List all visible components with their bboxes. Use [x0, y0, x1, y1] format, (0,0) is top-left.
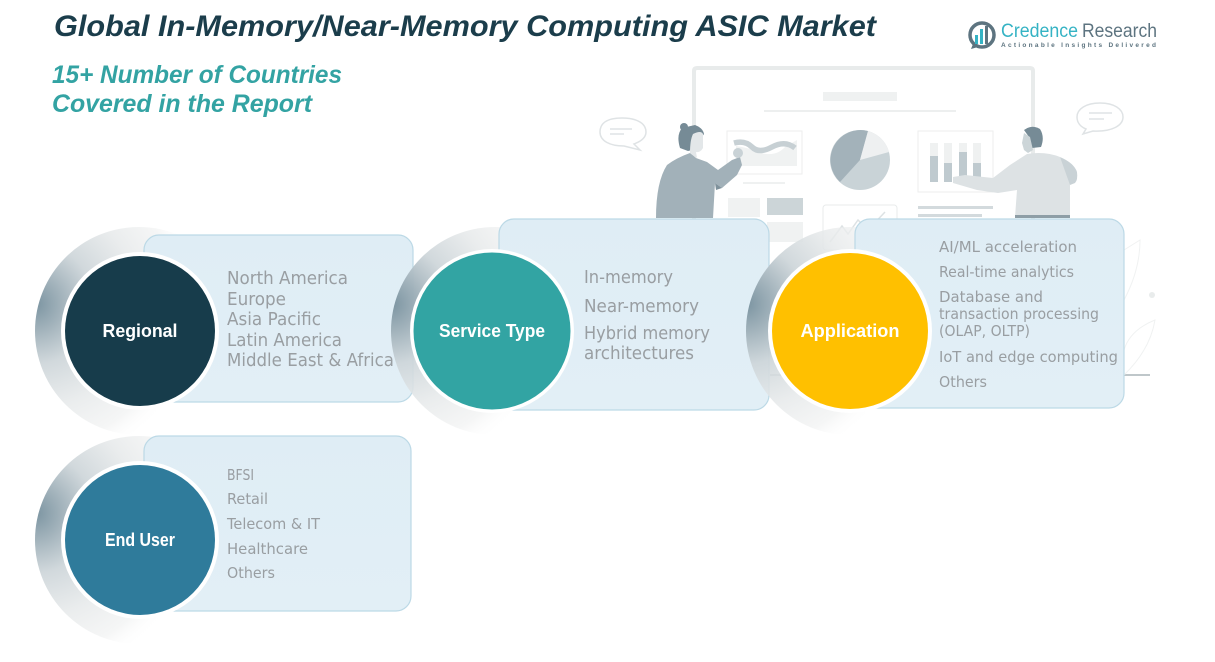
speech bubble left	[600, 118, 646, 150]
service crescent	[391, 227, 599, 435]
regional crescent	[35, 227, 243, 435]
application list	[939, 238, 1118, 391]
application list: Real-time analytics	[939, 263, 1074, 281]
panel: end user	[35, 436, 411, 644]
application list: (OLAP, OLTP)	[939, 322, 1030, 340]
subtitle: 15+ Number of Countries	[52, 61, 342, 89]
service list: In-memory	[584, 267, 673, 288]
service list: Hybrid memory	[584, 323, 710, 344]
regional circle	[61, 252, 219, 410]
speech bubble right	[1077, 103, 1123, 134]
board rule	[763, 118, 765, 120]
logo: Credence Research: Research	[1082, 21, 1157, 42]
end user circle: End User	[105, 529, 175, 550]
application circle: Application	[800, 320, 900, 341]
bar chart card	[918, 131, 993, 192]
logo: Credence Research: Actionable Insights Delivered	[1001, 42, 1156, 49]
regional list	[227, 268, 394, 371]
service list	[584, 267, 710, 364]
regional circle: Regional	[102, 320, 178, 341]
board heading bar	[823, 92, 897, 101]
woman presenter	[656, 123, 743, 218]
end user crescent	[35, 436, 243, 644]
application crescent	[746, 227, 954, 435]
application circle	[768, 249, 932, 413]
panel: service type	[391, 219, 769, 435]
logo: Credence Research: Credence	[1001, 21, 1078, 42]
regional card	[144, 235, 413, 402]
application list: transaction processing	[939, 305, 1099, 323]
end user circle	[61, 461, 219, 619]
end user list: Others	[227, 564, 275, 582]
logo: Credence Research	[970, 21, 1157, 49]
board frame	[694, 68, 1033, 225]
pie chart	[830, 130, 890, 190]
application list: Database and	[939, 288, 1043, 306]
small board blocks	[728, 182, 993, 250]
subtitle	[52, 61, 342, 118]
service list: architectures	[584, 343, 694, 364]
service circle	[410, 249, 574, 413]
service card	[499, 219, 769, 410]
subtitle: Covered in the Report	[52, 90, 314, 118]
end user list	[226, 466, 320, 582]
regional list: Asia Pacific	[227, 309, 321, 330]
title: Global In-Memory/Near-Memory Computing ASIC Market	[54, 10, 878, 43]
line chart card	[727, 131, 802, 174]
regional list: Europe	[227, 289, 286, 310]
regional list: Middle East & Africa	[227, 350, 394, 371]
regional list: North America	[227, 268, 348, 289]
application list: Others	[939, 373, 987, 391]
application list: IoT and edge computing	[939, 348, 1118, 366]
man presenter	[953, 127, 1077, 218]
end user list: Healthcare	[227, 540, 308, 558]
end user list: BFSI	[227, 466, 254, 484]
service list: Near-memory	[584, 296, 699, 317]
service circle: Service Type	[439, 320, 545, 341]
regional list: Latin America	[227, 330, 342, 351]
illustration: presentation board with two presenters	[600, 68, 1155, 376]
application list: AI/ML acceleration	[939, 238, 1077, 256]
end user card	[144, 436, 411, 611]
application card	[855, 219, 1124, 408]
floor line and plant	[770, 240, 1155, 376]
end user list: Retail	[227, 490, 268, 508]
panel: regional	[35, 227, 413, 435]
end user list: Telecom & IT	[226, 515, 320, 533]
panel: application	[746, 219, 1124, 435]
